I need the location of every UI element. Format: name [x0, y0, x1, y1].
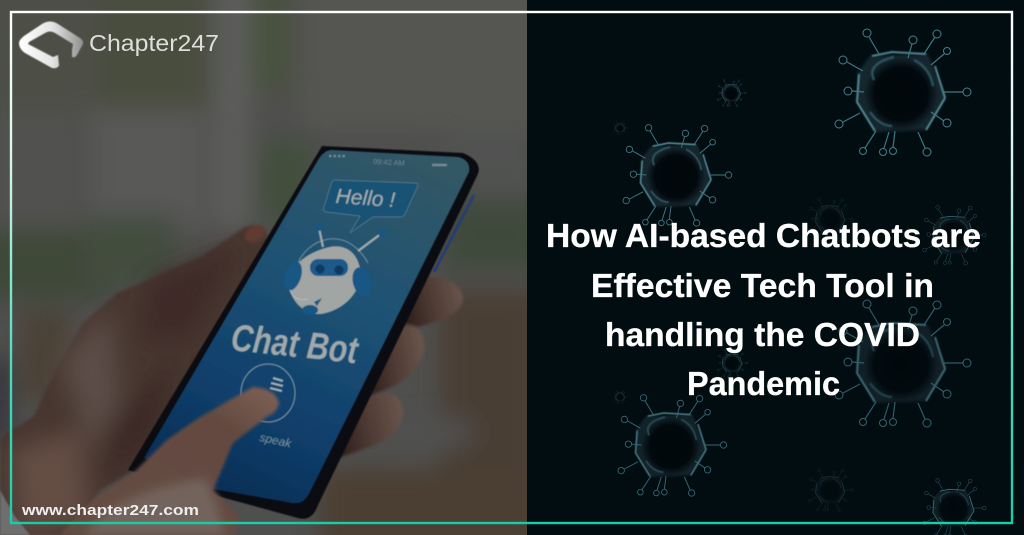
microphone button [241, 364, 295, 422]
tiny virus lower [613, 390, 628, 404]
speech bubble: Hello: Hello ! [335, 185, 396, 212]
faint virus behind title [923, 206, 986, 265]
logo wordmark: Chapter247 [89, 30, 219, 56]
phone body [128, 146, 479, 519]
title: Effective Tech Tool in [591, 267, 934, 304]
virus bottom right [923, 479, 986, 535]
tiny virus [613, 121, 628, 135]
title: Pandemic [687, 365, 840, 402]
large virus lower right [835, 300, 971, 427]
palm [0, 226, 268, 535]
virus lower left [618, 395, 727, 496]
title [546, 217, 981, 402]
small virus [717, 80, 746, 107]
virus mid left [623, 125, 732, 226]
robot mascot [281, 223, 386, 315]
logo: Chapter247 [19, 22, 219, 68]
thumb tip [241, 222, 269, 246]
palm shading [10, 245, 240, 535]
dark photo overlay [0, 0, 527, 535]
panel: photo of hand holding phone [0, 0, 545, 535]
large virus top right [835, 29, 971, 156]
phone side highlight [434, 195, 474, 272]
title: How AI-based Chatbots are [546, 217, 981, 254]
pointing finger [60, 387, 279, 535]
screen label: Chat Bot: Chat Bot [229, 317, 361, 372]
phone status bar [329, 156, 447, 168]
sleeve [0, 490, 30, 535]
faint virus bottom centre [808, 469, 854, 511]
phone screen [144, 150, 469, 503]
panel: dark virus background [527, 0, 1024, 535]
blurred background scenery [0, 0, 545, 535]
title: handling the COVID [605, 316, 920, 353]
speech bubble: Hello [323, 180, 418, 233]
website url: www.chapter247.com [21, 502, 199, 519]
fingers behind phone [332, 276, 463, 460]
small virus centre [717, 349, 748, 378]
icon: logo mark [19, 22, 83, 68]
finger knuckle [85, 478, 225, 535]
screen label: speak: speak [258, 430, 294, 451]
phone status bar: 09:42 AM [373, 157, 405, 168]
faint virus upper centre [808, 198, 854, 240]
